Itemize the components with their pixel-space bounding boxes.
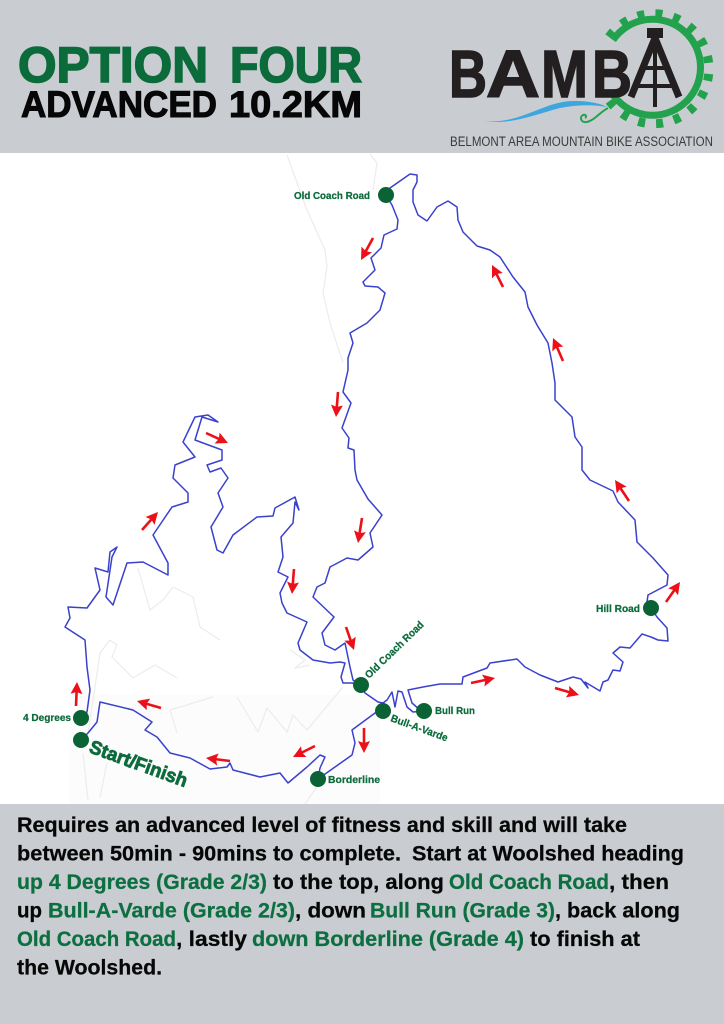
description text: up xyxy=(17,900,42,922)
waypoint labels: 4 Degrees xyxy=(23,712,71,724)
panel: description xyxy=(0,804,724,1024)
subtitle: advanced distance: 10.2KM xyxy=(229,84,362,125)
logo wordmark: M xyxy=(541,37,588,112)
icon: gear ring xyxy=(608,14,709,124)
description text: to the top, along xyxy=(273,871,444,894)
description text: to finish at xyxy=(530,928,640,951)
waypoint labels: Borderline xyxy=(328,774,380,786)
panel: map xyxy=(0,153,724,804)
logo: BAMBA xyxy=(449,14,713,149)
subtitle: advanced distance xyxy=(21,84,362,125)
description text: Bull-A-Varde (Grade 2/3) xyxy=(48,900,295,922)
description text: the Woolshed. xyxy=(17,956,162,980)
waypoint labels xyxy=(23,190,640,792)
description text: , then xyxy=(609,871,669,894)
logo wordmark: B xyxy=(592,37,632,112)
icon: blue river swoosh xyxy=(485,101,607,122)
description text: , lastly xyxy=(176,928,247,951)
icon: green koru xyxy=(581,108,608,122)
background roads xyxy=(83,154,377,804)
description text: , down xyxy=(295,900,366,922)
icon: headframe tower xyxy=(631,28,679,107)
waypoint labels: Bull-A-Varde xyxy=(389,713,450,744)
waypoint labels: Start/Finish xyxy=(86,737,190,792)
subtitle: advanced distance: ADVANCED xyxy=(21,84,217,125)
logo wordmark: A xyxy=(486,37,540,112)
waypoint markers xyxy=(73,187,659,787)
trail route xyxy=(65,174,668,783)
title: option four: FOUR xyxy=(230,37,362,93)
description text: between 50min - 90mins to complete. xyxy=(17,842,401,866)
direction arrows xyxy=(76,238,680,761)
description text xyxy=(17,814,684,980)
description text: Old Coach Road xyxy=(449,871,609,894)
description text: Bull Run (Grade 3) xyxy=(370,900,555,922)
waypoint labels: Old Coach Road xyxy=(363,619,426,681)
logo wordmark xyxy=(449,37,632,112)
description text: up 4 Degrees (Grade 2/3) xyxy=(17,871,267,894)
waypoint labels: Old Coach Road xyxy=(294,190,370,202)
description text: Requires an advanced level of fitness and skill and will take xyxy=(17,814,627,837)
title: option four: OPTION xyxy=(18,37,208,93)
title: option four xyxy=(18,37,362,93)
description text: , back along xyxy=(555,900,680,922)
description text: down Borderline (Grade 4) xyxy=(252,928,524,951)
logo wordmark: B xyxy=(449,37,487,112)
panel: header xyxy=(0,0,724,153)
description text: Old Coach Road xyxy=(17,928,176,951)
waypoint labels: Bull Run xyxy=(435,705,475,717)
waypoint labels: Hill Road xyxy=(596,603,640,615)
description text: Start at Woolshed heading xyxy=(412,842,684,866)
